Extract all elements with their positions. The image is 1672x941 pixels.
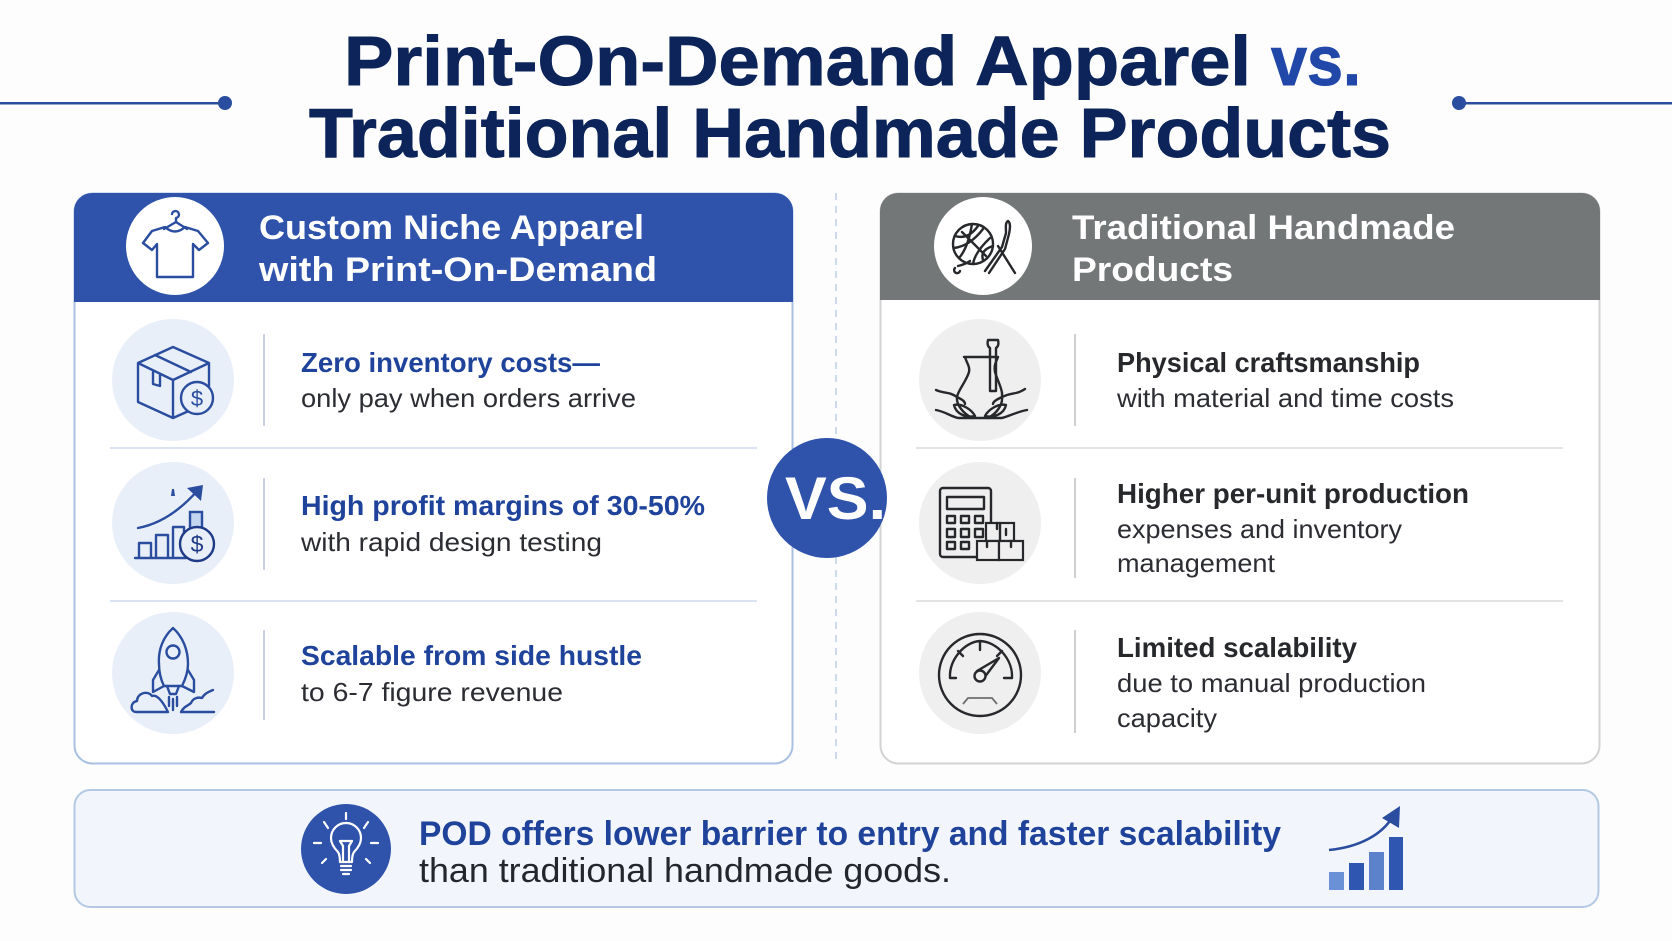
- icon: box with dollar coin: [138, 347, 213, 418]
- vs badge: [767, 438, 887, 558]
- icon: growth chart with coin: [135, 485, 214, 561]
- text: physical craftsmanship: [1116, 347, 1454, 413]
- item: scalable revenue: [112, 612, 642, 734]
- item: zero inventory costs: [112, 319, 636, 441]
- takeaway banner: [74, 790, 1598, 907]
- icon: box with dollar coin: $: [191, 386, 203, 411]
- text: higher per-unit production: management: [1117, 548, 1276, 578]
- text: zero inventory costs: Zero inventory costs—: [301, 347, 600, 378]
- panel heading: print-on-demand: Custom Niche Apparel: [259, 209, 644, 247]
- text: limited scalability: [1117, 632, 1426, 733]
- panel heading: print-on-demand: with Print-On-Demand: [258, 251, 657, 289]
- icon: speedometer gauge: [939, 634, 1021, 716]
- text: takeaway: POD offers lower barrier to entry and faster scalability: [419, 815, 1281, 853]
- panel header: traditional handmade: [880, 193, 1600, 300]
- panel heading: traditional handmade: Traditional Handmade: [1072, 209, 1455, 247]
- item: higher per-unit production: [919, 462, 1469, 584]
- panel heading: print-on-demand: [258, 209, 657, 289]
- left title accent line: [0, 96, 232, 110]
- title: [309, 22, 1391, 172]
- panel: print-on-demand: [74, 193, 793, 764]
- text: higher per-unit production: expenses and inventory: [1117, 514, 1402, 544]
- icon: growth chart with coin: $: [191, 531, 204, 557]
- title: Print-On-Demand Apparel: [344, 22, 1251, 100]
- panel header: print-on-demand: [74, 193, 793, 302]
- icon: lightbulb: [301, 804, 391, 894]
- text: zero inventory costs: only pay when orders arrive: [301, 383, 636, 413]
- text: scalable revenue: Scalable from side hustle: [301, 640, 642, 671]
- item: high profit margins: [112, 462, 705, 584]
- right title accent line: [1452, 96, 1672, 110]
- text: physical craftsmanship: with material and time costs: [1116, 383, 1454, 413]
- text: limited scalability: capacity: [1117, 703, 1217, 733]
- title: Traditional Handmade Products: [309, 94, 1391, 172]
- text: zero inventory costs: [301, 347, 636, 413]
- icon: yarn and crochet hooks: [934, 197, 1032, 295]
- icon: rising bar chart: [1329, 806, 1403, 890]
- icon: hands shaping vase: [936, 340, 1027, 418]
- item: limited scalability: [919, 612, 1426, 734]
- text: higher per-unit production: [1117, 478, 1469, 578]
- text: scalable revenue: [301, 640, 642, 707]
- item: physical craftsmanship: [919, 319, 1454, 441]
- text: limited scalability: Limited scalability: [1117, 632, 1357, 663]
- text: high profit margins: [300, 490, 705, 557]
- icon: calculator and boxes: [940, 488, 1023, 560]
- icon: rocket launch: [132, 628, 214, 712]
- text: takeaway: [419, 815, 1281, 890]
- panel: traditional handmade: [880, 193, 1600, 764]
- title: vs.: [1271, 22, 1361, 100]
- text: high profit margins: with rapid design testing: [300, 527, 602, 557]
- text: high profit margins: High profit margins of 30-50%: [301, 490, 705, 521]
- text: scalable revenue: to 6-7 figure revenue: [301, 677, 563, 707]
- text: higher per-unit production: Higher per-unit production: [1117, 478, 1469, 509]
- panel heading: traditional handmade: [1072, 209, 1455, 289]
- text: physical craftsmanship: Physical craftsmanship: [1117, 347, 1420, 378]
- vs badge: VS.: [785, 465, 886, 532]
- text: takeaway: than traditional handmade goods.: [419, 852, 951, 890]
- text: limited scalability: due to manual production: [1117, 668, 1426, 698]
- panel heading: traditional handmade: Products: [1072, 251, 1233, 289]
- icon: t-shirt on hanger: [126, 197, 224, 295]
